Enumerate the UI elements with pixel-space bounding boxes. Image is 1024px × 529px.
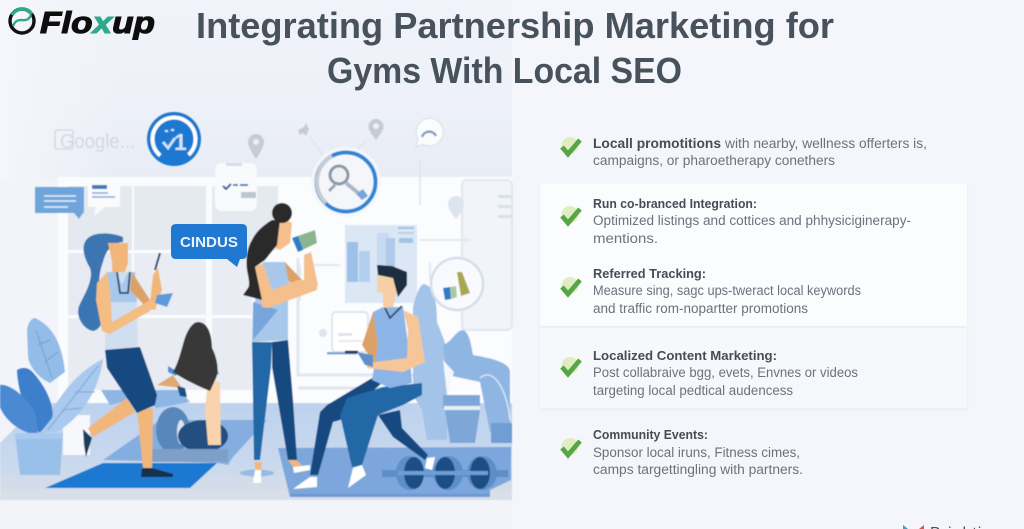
title: Integrating Partnership Marketing for (196, 5, 834, 46)
item: referred tracking: Referred Tracking: (593, 266, 706, 281)
panel: highlighted rows (540, 184, 967, 326)
item: co-branded integration (562, 196, 911, 246)
icon: magnifier circle (311, 147, 381, 217)
item: local promotions: campaigns, or pharoetherapy conethers (593, 153, 835, 168)
callout: CINDUS (171, 224, 247, 267)
item: local promotions (562, 136, 927, 168)
icon: check (562, 137, 580, 154)
icon: rank badge: 1 (174, 129, 187, 155)
dumbbells (382, 456, 508, 490)
icon: checklist card (215, 163, 257, 211)
icon: message bubbles (35, 180, 120, 219)
icon: speech bubble with arc (310, 118, 443, 205)
item: local promotions: with nearby, wellness offerters is, (724, 136, 927, 151)
icons: map pins (248, 119, 464, 219)
item: localized content marketing: Localized Content Marketing: (593, 348, 777, 363)
panel: localized content row (540, 328, 967, 408)
item: community events: camps targettingling with partners. (593, 462, 803, 477)
woman standing with phone (243, 203, 318, 483)
icon: check (562, 438, 580, 455)
title: Gyms With Local SEO (327, 50, 682, 91)
icon: check (562, 206, 580, 223)
icon: rank badge (144, 109, 204, 169)
title (196, 5, 834, 91)
icon: check (562, 357, 580, 374)
man seated with tablet (293, 265, 435, 489)
item: community events: Sponsor local iruns, Fitness cimes, (593, 445, 800, 460)
item: co-branded integration: Run co-branced Integration: (593, 196, 757, 211)
icon: Google label: Google... (60, 131, 135, 153)
icon: check (562, 277, 580, 294)
item: referred tracking: Measure sing, sagc ups-tweract local keywords (593, 283, 861, 298)
item: co-branded integration: Optimized listings and cottices and phhysiciginerapy- (593, 213, 911, 228)
callout: CINDUS: CINDUS (180, 234, 238, 251)
logo: Floxup: Floxup (40, 5, 155, 40)
item: referred tracking: and traffic rom-nopartter promotions (593, 301, 808, 316)
item: local promotions: Locall promotitions (593, 136, 721, 151)
item: referred tracking (562, 266, 861, 316)
item: localized content marketing: Post collabraive bgg, evets, Envnes or videos (593, 365, 858, 380)
floor (0, 403, 512, 500)
item: community events (562, 427, 803, 477)
icon: logo ring (10, 9, 34, 33)
woman seated on weights (101, 322, 228, 462)
left plant (0, 318, 103, 475)
woman stretching on left (78, 233, 173, 477)
left illustration background (0, 0, 512, 529)
illustration: gym partnership scene (0, 109, 512, 500)
icon: bar chart magnifier (431, 258, 483, 310)
item: co-branded integration: mentions. (593, 231, 658, 246)
item: localized content marketing (562, 348, 858, 398)
item: localized content marketing: targeting local pedtical audencess (593, 383, 793, 398)
right plants (413, 284, 512, 443)
chart panel (345, 225, 417, 303)
room wall and windows (58, 177, 512, 403)
exercise mats (45, 420, 511, 497)
item: community events: Community Events: (593, 427, 708, 442)
